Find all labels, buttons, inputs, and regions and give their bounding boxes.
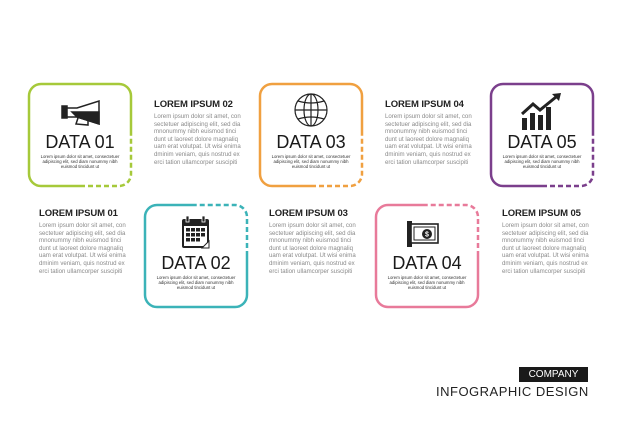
infographic design title: INFOGRAPHIC DESIGN (436, 384, 589, 399)
text block: lorem ipsum 01: sectetuer adipiscing elit, sed dia (39, 230, 125, 237)
text block: lorem ipsum 03 (269, 208, 356, 275)
text block: lorem ipsum 02: Lorem ipsum dolor sit amet, con (154, 113, 241, 120)
data 03: euismod tincidunt ut (292, 164, 330, 169)
data 03: Lorem ipsum dolor sit amet, consectetuer (272, 154, 350, 159)
text block: lorem ipsum 03: sectetuer adipiscing elit, sed dia (269, 230, 355, 237)
data 05: Lorem ipsum dolor sit amet, consectetuer (503, 154, 581, 159)
text block: lorem ipsum 02: dunt ut laoreet dolore magnaliq (154, 136, 238, 143)
icon: calendar (182, 216, 209, 248)
text block: lorem ipsum 05: dminim veniam, quis nostrud ex (502, 260, 588, 267)
text block: lorem ipsum 02: LOREM IPSUM 02 (154, 99, 233, 110)
data 04: DATA 04 (392, 253, 462, 273)
text block: lorem ipsum 04: dunt ut laoreet dolore magnaliq (385, 136, 469, 143)
box 2 teal (145, 205, 247, 307)
data 01: Lorem ipsum dolor sit amet, consectetuer (41, 154, 119, 159)
icon: globe (295, 94, 327, 126)
icon: money: $ (425, 232, 429, 238)
data 01 (40, 132, 120, 169)
data 01: euismod tincidunt ut (61, 164, 99, 169)
data 01: DATA 01 (45, 132, 115, 152)
data 04: euismod tincidunt ut (408, 285, 446, 290)
text block: lorem ipsum 01: LOREM IPSUM 01 (39, 208, 118, 219)
text block: lorem ipsum 01: dunt ut laoreet dolore magnaliq (39, 245, 123, 252)
text block: lorem ipsum 03: mnonummy nibh euismod tinci (269, 237, 351, 244)
data 02: DATA 02 (161, 253, 231, 273)
data 03: adipiscing elit, sed diam nonummy nibh (274, 159, 348, 164)
icon: money (407, 221, 438, 247)
text block: lorem ipsum 04: erci tation ullamcorper suscipiti (385, 159, 468, 166)
box 4 pink (376, 205, 478, 307)
text block: lorem ipsum 03: erci tation ullamcorper suscipiti (269, 268, 352, 275)
text block: lorem ipsum 04: LOREM IPSUM 04 (385, 99, 464, 110)
text block: lorem ipsum 03: uam erat volutpat. Ut wisi enima (269, 252, 356, 259)
text block: lorem ipsum 03: dminim veniam, quis nostrud ex (269, 260, 355, 267)
data 01: adipiscing elit, sed diam nonummy nibh (42, 159, 118, 164)
text block: lorem ipsum 04: uam erat volutpat. Ut wisi enima (385, 143, 472, 150)
box 5 purple (491, 84, 593, 186)
data 02: Lorem ipsum dolor sit amet, consectetuer (157, 275, 235, 280)
text block: lorem ipsum 01: dminim veniam, quis nostrud ex (39, 260, 125, 267)
data 05: adipiscing elit, sed diam nonummy nibh (504, 159, 580, 164)
text block: lorem ipsum 01: uam erat volutpat. Ut wisi enima (39, 252, 126, 259)
data 04 (388, 253, 466, 290)
text block: lorem ipsum 02 (154, 99, 241, 166)
box 1 green (29, 84, 131, 186)
data 02: euismod tincidunt ut (177, 285, 215, 290)
text block: lorem ipsum 05: Lorem ipsum dolor sit amet, con (502, 222, 589, 229)
icon: growth chart (522, 93, 561, 130)
text block: lorem ipsum 05 (502, 208, 589, 275)
data 04: adipiscing elit, sed diam nonummy nibh (390, 280, 464, 285)
data 02: adipiscing elit, sed diam nonummy nibh (158, 280, 234, 285)
data 03: DATA 03 (276, 132, 346, 152)
text block: lorem ipsum 02: dminim veniam, quis nostrud ex (154, 151, 240, 158)
text block: lorem ipsum 03: Lorem ipsum dolor sit amet, con (269, 222, 356, 229)
text block: lorem ipsum 01 (39, 208, 126, 275)
company label (519, 367, 588, 382)
text block: lorem ipsum 05: uam erat volutpat. Ut wisi enima (502, 252, 589, 259)
text block: lorem ipsum 05: erci tation ullamcorper suscipiti (502, 268, 585, 275)
text block: lorem ipsum 04: mnonummy nibh euismod tinci (385, 128, 467, 135)
text block: lorem ipsum 02: uam erat volutpat. Ut wisi enima (154, 143, 241, 150)
data 05 (502, 132, 582, 169)
data 03 (272, 132, 350, 169)
text block: lorem ipsum 03: dunt ut laoreet dolore magnaliq (269, 245, 353, 252)
data 02 (156, 253, 236, 290)
company label: COMPANY (529, 369, 578, 380)
data 05: DATA 05 (507, 132, 577, 152)
data 04: Lorem ipsum dolor sit amet, consectetuer (388, 275, 466, 280)
text block: lorem ipsum 05: mnonummy nibh euismod tinci (502, 237, 584, 244)
text block: lorem ipsum 05: sectetuer adipiscing elit, sed dia (502, 230, 588, 237)
text block: lorem ipsum 02: mnonummy nibh euismod tinci (154, 128, 236, 135)
text block: lorem ipsum 01: mnonummy nibh euismod tinci (39, 237, 121, 244)
text block: lorem ipsum 03: LOREM IPSUM 03 (269, 208, 348, 219)
box 3 orange (260, 84, 362, 186)
text block: lorem ipsum 05: LOREM IPSUM 05 (502, 208, 581, 219)
icon: megaphone (62, 101, 99, 125)
text block: lorem ipsum 05: dunt ut laoreet dolore magnaliq (502, 245, 586, 252)
text block: lorem ipsum 04: dminim veniam, quis nostrud ex (385, 151, 471, 158)
text block: lorem ipsum 01: Lorem ipsum dolor sit amet, con (39, 222, 126, 229)
text block: lorem ipsum 01: erci tation ullamcorper suscipiti (39, 268, 122, 275)
text block: lorem ipsum 04: sectetuer adipiscing elit, sed dia (385, 121, 471, 128)
text block: lorem ipsum 02: sectetuer adipiscing elit, sed dia (154, 121, 240, 128)
data 05: euismod tincidunt ut (523, 164, 561, 169)
text block: lorem ipsum 04: Lorem ipsum dolor sit amet, con (385, 113, 472, 120)
text block: lorem ipsum 04 (385, 99, 472, 166)
text block: lorem ipsum 02: erci tation ullamcorper suscipiti (154, 159, 237, 166)
